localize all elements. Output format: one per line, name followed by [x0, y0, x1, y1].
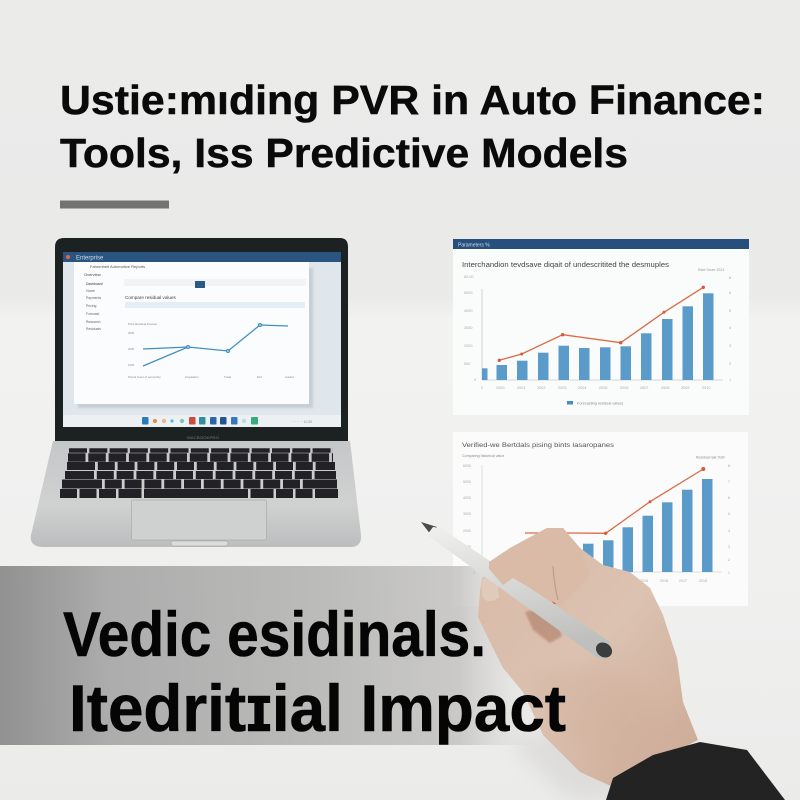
pen [421, 522, 615, 661]
axis labels [464, 275, 731, 390]
screen [63, 252, 341, 427]
side menu: Residuals [86, 327, 101, 331]
panel heading: Interchandion tevdsave diqait of undescritited the desmuples [462, 260, 669, 269]
trend line [498, 286, 705, 362]
function key row [69, 448, 333, 453]
axis labels: 0 [474, 378, 476, 382]
axis labels: 2010 [702, 386, 710, 390]
axis labels: 2005 [599, 386, 607, 390]
lower letter row [62, 480, 337, 488]
chart axis labels: Price Residual forecast [128, 322, 157, 326]
axis labels: 6 [729, 291, 731, 295]
panel background [453, 239, 749, 415]
keyboard [60, 450, 338, 494]
finger crease [553, 566, 558, 600]
lid notch [171, 541, 228, 546]
laptop [31, 238, 361, 547]
chart axis labels: 1000 [128, 363, 135, 367]
axis labels: 4 [728, 529, 730, 533]
side menu [84, 272, 103, 331]
axis labels: 6000 [463, 464, 471, 468]
hand [478, 528, 698, 787]
title line 1: Ustie:mıding PVR in Auto Finance: [60, 77, 765, 123]
axis labels: 3 [729, 344, 731, 348]
lower headline line 2: Itedritɪial Impact [69, 671, 566, 745]
axes [482, 289, 723, 380]
chart axis labels [128, 322, 295, 379]
app icon [66, 255, 70, 259]
active toolbar tab [195, 281, 205, 288]
laptop lid [55, 238, 348, 441]
axis labels: 0 [481, 386, 483, 390]
chart axis labels: Exit [257, 375, 262, 379]
screen title text: Enterprise [76, 256, 104, 262]
reflected red accent [552, 596, 558, 604]
axis labels: 2004 [578, 386, 586, 390]
lower headline line 1: Vedic esidinals. [63, 600, 486, 670]
highlight strip [125, 302, 305, 308]
axis labels: 3000 [464, 326, 472, 330]
hand shadow [510, 720, 640, 800]
axis labels: 2007 [640, 386, 648, 390]
chart panel: bottom [453, 432, 748, 606]
axis labels: 5000 [463, 480, 471, 484]
axis labels: 2001 [517, 386, 525, 390]
index finger over pen [489, 528, 590, 606]
axis labels: 1 [729, 378, 731, 382]
knuckle shading [530, 660, 670, 770]
pen barrel [427, 527, 610, 660]
taskbar [63, 415, 341, 427]
brand label: MACBOOKPRO [187, 436, 219, 440]
inner palm shadow [525, 606, 562, 643]
number key row [68, 453, 333, 462]
axis labels: 1000 [463, 545, 471, 549]
axis labels: 2008 [661, 386, 669, 390]
toolbar [124, 279, 306, 286]
window menu: Fahrenheit Automotive Reports [90, 264, 145, 269]
legend right: Rate Score 2024 [698, 268, 724, 272]
taskbar icons [142, 417, 258, 424]
axis labels: 2009 [681, 386, 689, 390]
axis labels: 4 [729, 326, 731, 330]
axis labels: 500 [464, 362, 470, 366]
trend line [525, 467, 705, 535]
axis labels: 4000 [464, 309, 472, 313]
panel subheading: Comparing historical value [462, 454, 504, 458]
side menu: Overview [84, 272, 101, 277]
side menu: Forecast [86, 312, 99, 316]
axis labels: 60,00 [464, 275, 474, 279]
side menu: Pricing [86, 304, 96, 308]
chart axis labels: Trade [224, 375, 232, 379]
axis labels: 7 [728, 480, 730, 484]
chart axis labels: Period Years of ownership [128, 375, 161, 379]
thumb nail [481, 575, 499, 601]
panel heading: Verified-we Bertdals pising bints lasaropanes [462, 442, 615, 449]
axis labels: 2006 [620, 386, 628, 390]
panel header [453, 239, 749, 249]
window shadow [78, 268, 313, 408]
axis labels: 1 [728, 571, 730, 575]
axis labels: 4000 [463, 496, 471, 500]
pen cap [593, 639, 615, 661]
chart axis labels: 3000 [128, 331, 135, 335]
axis labels: 5000 [464, 291, 472, 295]
axes [482, 465, 722, 572]
title line 2: Tools, Iss Predictive Models [60, 130, 628, 176]
side menu: Home [86, 289, 95, 293]
axis labels [463, 464, 730, 583]
side menu: Dashboard [86, 282, 103, 286]
bars [482, 293, 714, 380]
system tray: · ·· ·· ·· 10:30 [292, 420, 312, 424]
axis labels: 5 [729, 309, 731, 313]
legend right: Residual rate %20 [696, 456, 725, 460]
space bar row [60, 489, 338, 498]
axis labels: 0 [473, 571, 475, 575]
axis labels: 3 [728, 545, 730, 549]
chart panel: top [453, 239, 749, 415]
grey text band [0, 566, 540, 745]
axis labels: 2002 [537, 386, 545, 390]
application window [74, 262, 309, 404]
header text: Parameters % [458, 242, 490, 248]
title divider bar [60, 200, 169, 208]
pen tip [421, 522, 437, 535]
axis labels: 5 [728, 512, 730, 516]
chart axis labels: Acquisition [185, 375, 199, 379]
bars [528, 479, 712, 572]
side menu: Payments [86, 296, 101, 300]
axis labels: 2017 [679, 579, 687, 583]
top letter row [67, 462, 335, 470]
middle letter row [65, 471, 336, 479]
title [60, 77, 765, 176]
axis labels: 2018 [699, 579, 707, 583]
axis labels: 3000 [463, 512, 471, 516]
chart axis labels: Auction [285, 375, 295, 379]
trackpad [132, 500, 266, 540]
axis labels: 2 [728, 558, 730, 562]
axis labels: 8 [728, 464, 730, 468]
line chart [143, 324, 288, 366]
panel background [453, 432, 748, 606]
chart axis labels: 2000 [128, 347, 135, 351]
axis labels: 2016 [660, 579, 668, 583]
sleeve [606, 742, 785, 800]
laptop base [31, 441, 361, 547]
screen title bar [63, 252, 341, 262]
chart heading: Compare residual values [125, 295, 177, 300]
side menu: Research [86, 320, 101, 324]
axis labels: 2000 [463, 529, 471, 533]
axis labels: 2003 [558, 386, 566, 390]
axis labels: 2015 [640, 579, 648, 583]
axis labels: 8 [729, 276, 731, 280]
axis labels: 2000 [464, 344, 472, 348]
axis labels: 2 [729, 362, 731, 366]
axis labels: 2000 [496, 386, 504, 390]
legend: Forecasting residual values [577, 402, 623, 406]
hand holding pen [421, 522, 785, 800]
axis labels: 6 [728, 496, 730, 500]
